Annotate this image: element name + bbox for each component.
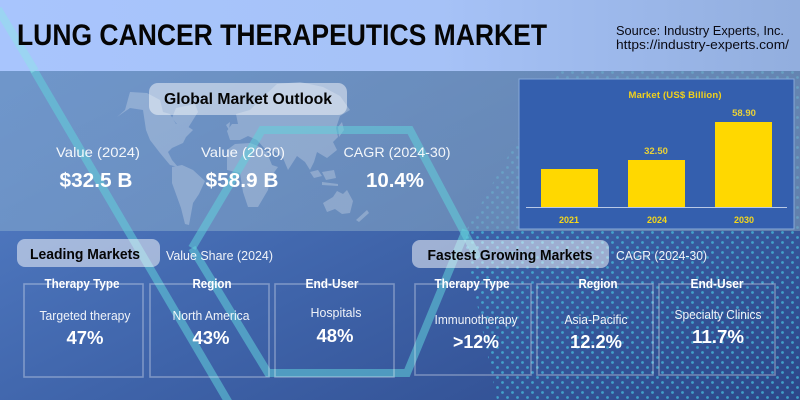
card: therapy type leading: Targeted therapy — [40, 308, 131, 323]
stat: CAGR — [344, 144, 450, 192]
bars — [541, 122, 772, 207]
stat: value 2024 — [56, 144, 140, 192]
card: region growing: Region — [578, 276, 618, 291]
card: therapy type leading: 47% — [66, 328, 104, 348]
card: region leading: 43% — [192, 328, 230, 348]
source — [616, 23, 789, 52]
card: end-user growing — [659, 276, 775, 375]
card: region growing — [537, 276, 653, 375]
chart title: Market (US$ Billion) — [628, 90, 722, 101]
card: end-user leading: 48% — [316, 326, 354, 346]
source: Source: Industry Experts, Inc. — [616, 23, 784, 38]
card: therapy type growing: Therapy Type — [434, 276, 510, 291]
panel: leading markets heading: Leading Markets — [30, 246, 140, 263]
card: therapy type leading: Therapy Type — [44, 276, 120, 291]
card: region leading: Region — [192, 276, 232, 291]
year labels: 2024 — [647, 215, 667, 225]
card: therapy type growing: >12% — [453, 332, 499, 352]
stat: value 2030 — [201, 144, 285, 192]
stat: value 2024: $32.5 B — [60, 170, 132, 192]
card: region growing: 12.2% — [570, 332, 622, 352]
card: end-user leading — [275, 276, 394, 377]
card: end-user growing: 11.7% — [692, 327, 744, 347]
world map — [117, 82, 369, 225]
data labels: 32.50 — [644, 146, 668, 157]
panel: fastest growing markets heading: Fastest Growing Markets — [428, 247, 592, 264]
middle band: global market outlook — [0, 71, 800, 231]
card: therapy type growing: Immunotherapy — [434, 312, 518, 327]
teal hexagon outline — [0, 9, 478, 400]
panel: global market outlook heading — [149, 83, 347, 115]
card: region growing: Asia-Pacific — [564, 312, 628, 327]
title: LUNG CANCER THERAPEUTICS MARKET — [17, 19, 547, 52]
leading markets subtitle: Value Share (2024) — [166, 248, 273, 263]
source: https://industry-experts.com/ — [616, 37, 789, 52]
panel: leading markets heading — [17, 239, 160, 267]
year labels — [559, 215, 754, 225]
data labels — [644, 108, 756, 157]
card: therapy type leading — [24, 276, 143, 377]
dotted hexagon pattern — [463, 71, 800, 400]
stat: value 2024: Value (2024) — [56, 144, 140, 160]
card: end-user leading: Hospitals — [310, 305, 362, 320]
year labels: 2021 — [559, 215, 579, 225]
panel: global market outlook heading: Global Market Outlook — [164, 91, 332, 108]
header diagonal accent — [0, 9, 35, 71]
data labels: 58.90 — [732, 108, 756, 119]
fastest growing subtitle: CAGR (2024-30) — [616, 248, 707, 263]
header band — [0, 0, 800, 71]
card: therapy type growing — [415, 276, 531, 375]
bar chart — [519, 79, 794, 229]
card: region leading: North America — [172, 308, 250, 323]
stat: CAGR: 10.4% — [366, 170, 424, 192]
card: region leading — [150, 276, 269, 377]
year labels: 2030 — [734, 215, 754, 225]
panel: fastest growing markets heading — [412, 240, 609, 268]
card: end-user leading: End-User — [306, 276, 358, 291]
stat: value 2030: $58.9 B — [206, 170, 278, 192]
card: end-user growing: Specialty Clinics — [674, 307, 762, 322]
stat: CAGR: CAGR (2024-30) — [344, 144, 450, 160]
card: end-user growing: End-User — [690, 276, 744, 291]
stat: value 2030: Value (2030) — [201, 144, 285, 160]
